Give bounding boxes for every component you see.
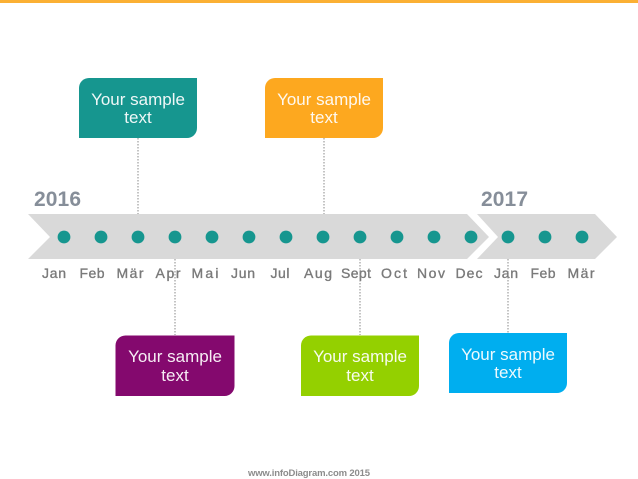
timeline dots (58, 231, 588, 243)
month labels: Apr (156, 265, 181, 281)
callout: blue (449, 333, 567, 393)
connector: April (174, 259, 176, 335)
month labels: Mär (568, 265, 595, 281)
connector: August (323, 138, 325, 214)
year label 2017: 2017 (481, 188, 528, 211)
month labels: Jan (42, 265, 66, 281)
month labels: Feb (530, 265, 556, 281)
month labels: Oct (381, 265, 407, 281)
ribbon segment 2017 (477, 214, 617, 259)
month labels: Jan (494, 265, 518, 281)
timeline ribbon (28, 214, 617, 259)
month labels: Mai (192, 265, 218, 281)
month labels: Mär (116, 265, 144, 281)
callout: teal: text (124, 108, 152, 127)
callout: blue: Your sample (461, 345, 555, 364)
month labels: Jul (270, 265, 290, 281)
callout: green: text (346, 366, 374, 385)
month labels (42, 265, 595, 281)
connector: September (359, 259, 361, 335)
month labels: Sept (341, 265, 371, 281)
year label 2016: 2016 (34, 188, 81, 211)
callout: orange (265, 78, 383, 138)
month labels: Jun (231, 265, 255, 281)
callout: purple (116, 336, 234, 396)
callout: blue: text (494, 363, 522, 382)
callout: teal (79, 78, 197, 138)
callout: orange: text (310, 108, 338, 127)
month labels: Dec (456, 265, 482, 281)
month labels: Aug (304, 265, 332, 281)
callout: purple: text (161, 366, 189, 385)
callout: teal: Your sample (91, 90, 185, 109)
callout: orange: Your sample (277, 90, 371, 109)
month labels: Nov (417, 265, 445, 281)
footer credit: www.infoDiagram.com 2015 (247, 468, 371, 479)
top accent bar (0, 0, 638, 3)
connector: January 2017 (507, 259, 509, 333)
ribbon segment 2016 (28, 214, 489, 259)
callout: purple: Your sample (128, 347, 222, 366)
callout: green: Your sample (313, 347, 407, 366)
connector: March 2016 (137, 138, 139, 214)
callout: green (301, 336, 419, 396)
month labels: Feb (80, 265, 105, 281)
